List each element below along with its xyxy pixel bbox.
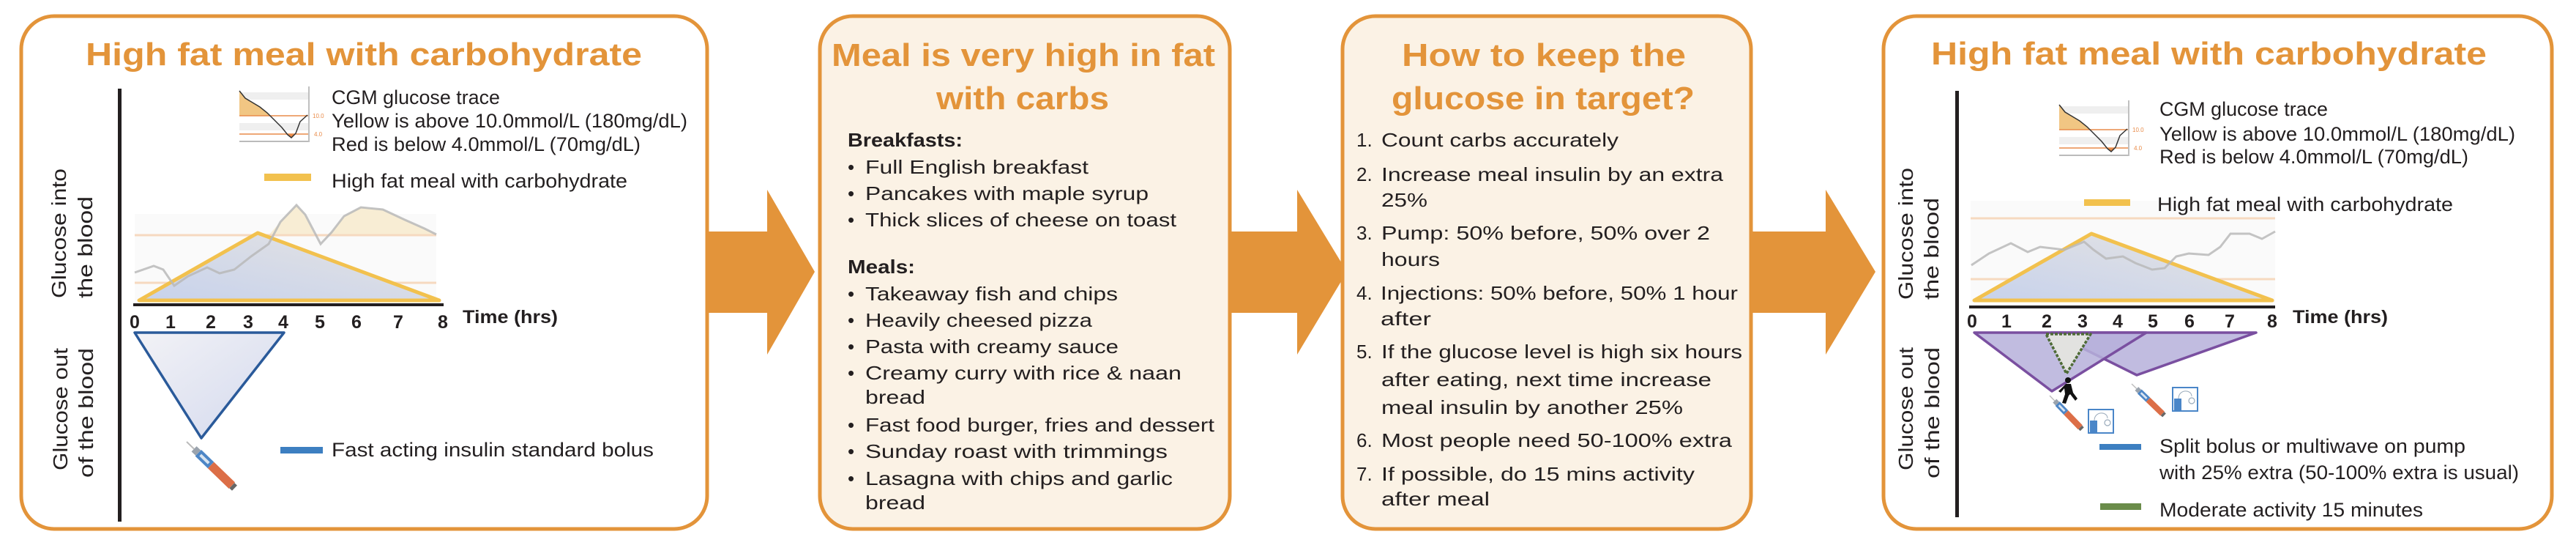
list: meals: Heavily cheesed pizza [865, 309, 1093, 331]
numbered list [1356, 129, 1742, 510]
list: breakfasts: Pancakes with maple syrup [865, 182, 1149, 204]
icon: CGM mini chart: 4.0 [314, 131, 323, 138]
chart: glucose into blood [1969, 201, 2275, 308]
list: meals: Fast food burger, fries and dessert [865, 414, 1215, 436]
axis numbers [130, 312, 448, 333]
axis numbers: 3 [2077, 311, 2088, 332]
list: meals: Sunday roast with trimmings [865, 440, 1168, 462]
list: breakfasts: Thick slices of cheese on toast [865, 209, 1177, 231]
split bolus shapes [1974, 333, 2256, 391]
axis numbers: 2 [206, 312, 216, 333]
legend: CGM text: CGM glucose trace [332, 86, 500, 108]
panel: high fat meal standard bolus [21, 16, 707, 529]
axis numbers: 7 [393, 312, 403, 333]
axis label: glucose out: Glucose out [1894, 347, 1917, 470]
arrow 1 [707, 190, 815, 355]
numbered list: Most people need 50-100% extra [1381, 429, 1733, 451]
axis label: glucose into [1894, 168, 1943, 300]
list: breakfasts: Full English breakfast [865, 156, 1089, 178]
axis label: glucose out [1894, 347, 1944, 478]
legend: CGM text: Yellow is above 10.0mmol/L (180mg/dL) [332, 110, 687, 132]
icon: insulin pen 1 [2047, 393, 2084, 432]
list: meals: bread [865, 386, 925, 408]
list: meals: Pasta with creamy sauce [865, 336, 1119, 358]
list: meals: bread [865, 492, 925, 514]
list: meals: • [848, 283, 854, 305]
axis numbers: 1 [2001, 311, 2012, 332]
numbered list: Pump: 50% before, 50% over 2 [1381, 222, 1710, 244]
numbered list: Injections: 50% before, 50% 1 hour [1381, 282, 1738, 304]
numbered list: 3. [1356, 222, 1373, 244]
axis label: glucose into: the blood [74, 196, 97, 298]
arrow 3 [1751, 190, 1875, 355]
axis title: Time (hrs) [2293, 307, 2388, 327]
heading [832, 37, 1215, 116]
numbered list: 1. [1356, 129, 1373, 151]
numbered list: Increase meal insulin by an extra [1381, 163, 1724, 185]
legend: CGM text: Yellow is above 10.0mmol/L (180mg/dL) [2159, 123, 2515, 145]
activity triangle [2046, 334, 2091, 374]
legend: split bolus: Split bolus or multiwave on pump [2159, 435, 2465, 457]
axis numbers: 3 [243, 312, 253, 333]
list: meals: • [848, 336, 854, 358]
list: meals [848, 256, 1215, 514]
panel: how to keep glucose in target [1343, 16, 1751, 529]
legend: high fat meal: High fat meal with carbohydrate [2157, 193, 2453, 215]
list: meals: Takeaway fish and chips [865, 283, 1118, 305]
list: meals: Meals: [848, 256, 915, 278]
numbered list: 7. [1356, 463, 1373, 485]
legend: high fat meal: High fat meal with carbohydrate [332, 170, 627, 192]
vertical axis line [118, 89, 122, 522]
legend: CGM text: CGM glucose trace [2159, 98, 2328, 120]
list: breakfasts [848, 129, 1177, 231]
numbered list: after meal [1381, 488, 1490, 510]
axis numbers: 0 [130, 312, 140, 333]
list: breakfasts: • [848, 209, 854, 231]
list: meals: • [848, 414, 854, 436]
heading: High fat meal with carbohydrate [86, 37, 642, 73]
axis numbers: 1 [165, 312, 176, 333]
numbered list: If possible, do 15 mins activity [1381, 463, 1695, 485]
heading: with carbs [936, 81, 1109, 116]
legend: moderate activity: Moderate activity 15 minutes [2159, 499, 2423, 521]
axis numbers: 2 [2042, 311, 2052, 332]
icon: pump 1 [2088, 410, 2113, 433]
heading: High fat meal with carbohydrate [1931, 36, 2487, 72]
numbered list: 25% [1381, 189, 1427, 211]
list: breakfasts: Breakfasts: [848, 129, 963, 151]
axis label: glucose out: of the blood [1921, 347, 1944, 478]
numbered list: after eating, next time increase [1381, 369, 1711, 390]
arrow 2 [1230, 190, 1347, 355]
icon: CGM mini chart: 10.0 [2132, 127, 2144, 133]
list: breakfasts: • [848, 156, 854, 178]
numbered list: 2. [1356, 163, 1373, 185]
legend: CGM text [2159, 98, 2515, 168]
axis numbers: 8 [2267, 311, 2277, 332]
axis numbers: 8 [438, 312, 448, 333]
heading [1392, 37, 1695, 116]
icon: CGM mini chart [239, 86, 324, 142]
numbered list: 5. [1356, 341, 1373, 363]
axis numbers: 6 [351, 312, 362, 333]
axis numbers: 5 [315, 312, 325, 333]
list: meals: • [848, 362, 854, 384]
list: meals: Lasagna with chips and garlic [865, 467, 1173, 489]
list: meals: • [848, 467, 854, 489]
axis numbers: 4 [278, 312, 288, 333]
list: meals: • [848, 309, 854, 331]
icon: CGM mini chart [2059, 100, 2144, 156]
axis label: glucose into: Glucose into [48, 169, 70, 298]
icon: CGM mini chart: 4.0 [2134, 145, 2143, 152]
axis label: glucose out: of the blood [75, 348, 97, 478]
axis numbers: 7 [2225, 311, 2235, 332]
heading: How to keep the [1402, 37, 1686, 73]
icon: insulin pen 2 [2129, 382, 2166, 418]
heading: Meal is very high in fat [832, 37, 1215, 73]
icon: walking person [2058, 377, 2077, 404]
numbered list: 4. [1356, 282, 1373, 304]
legend: CGM text: Red is below 4.0mmol/L (70mg/dL) [332, 133, 641, 155]
list: breakfasts: • [848, 182, 854, 204]
axis label: glucose into: the blood [1920, 198, 1943, 300]
panel: high fat meal split bolus [1884, 16, 2552, 529]
panel: meal is very high in fat [820, 16, 1230, 529]
heading: glucose in target? [1392, 81, 1695, 116]
numbered list: hours [1381, 248, 1440, 270]
list: meals: Creamy curry with rice & naan [865, 362, 1181, 384]
axis title: Time (hrs) [463, 307, 558, 327]
axis label: glucose into: Glucose into [1894, 168, 1917, 300]
numbered list: 6. [1356, 429, 1373, 451]
icon: pump 2 [2173, 388, 2198, 411]
numbered list: meal insulin by another 25% [1381, 396, 1683, 418]
axis label: glucose into [48, 169, 97, 298]
legend: split bolus: with 25% extra (50-100% extra is usual) [2159, 462, 2519, 484]
insulin triangle [135, 333, 284, 438]
axis numbers: 5 [2148, 311, 2158, 332]
list: meals: • [848, 440, 854, 462]
legend: fast acting insulin: Fast acting insulin standard bolus [332, 439, 654, 461]
axis label: glucose out: Glucose out [49, 348, 72, 470]
numbered list: after [1381, 308, 1431, 330]
numbered list: Count carbs accurately [1381, 129, 1619, 151]
legend: split bolus [2099, 435, 2519, 484]
numbered list: If the glucose level is high six hours [1381, 341, 1742, 363]
chart: glucose into blood [133, 205, 444, 306]
axis label: glucose out [49, 348, 97, 478]
axis numbers: 6 [2184, 311, 2195, 332]
axis numbers: 4 [2113, 311, 2123, 332]
legend: CGM text [332, 86, 687, 155]
axis numbers: 0 [1967, 311, 1977, 332]
legend: CGM text: Red is below 4.0mmol/L (70mg/dL) [2159, 146, 2468, 168]
vertical axis line [1955, 91, 1959, 517]
icon: CGM mini chart: 10.0 [313, 113, 324, 119]
axis numbers [1967, 311, 2277, 332]
icon: insulin pen [184, 439, 238, 492]
